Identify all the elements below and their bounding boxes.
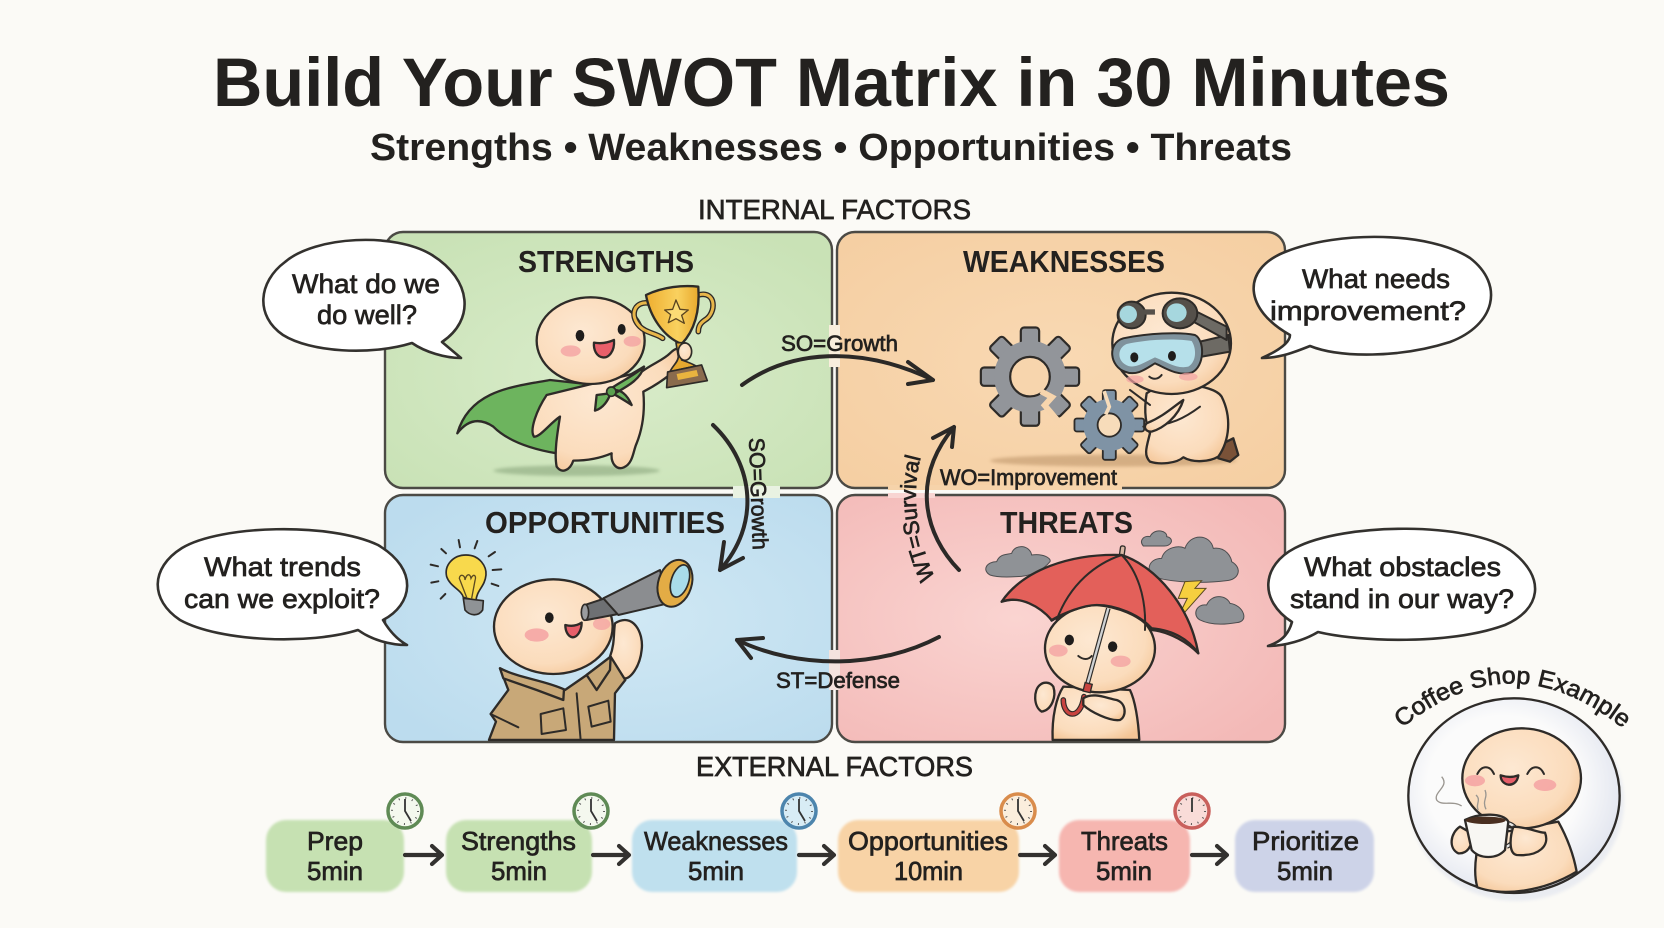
step: prep: Prep (307, 826, 363, 856)
speech bubble: what obstacles stand in our way: stand in our way? (1290, 584, 1514, 614)
arrow: SO growth horizontal: SO=Growth (781, 331, 898, 356)
speech bubble: what do we do well: do well? (317, 300, 417, 330)
step: strengths: Strengths (461, 826, 576, 856)
panel: opportunities (385, 495, 832, 742)
speech bubble: what needs improvement (1254, 237, 1491, 358)
icon: safety goggles (1112, 333, 1202, 374)
speech bubble: what do we do well (263, 240, 465, 358)
step: threats: 5min (1096, 856, 1152, 886)
arrow: WT survival: WT=Survival (900, 454, 934, 584)
icon: coffee cup (1465, 815, 1508, 857)
heading: threats: THREATS (1000, 505, 1133, 540)
icon: clock green (574, 794, 608, 828)
label: WO improvement: WO=Improvement (940, 465, 1117, 490)
character: coffee drinker (1436, 728, 1581, 892)
step: weaknesses: Weaknesses (644, 826, 788, 856)
icon: clock green (388, 794, 422, 828)
speech bubble: what obstacles stand in our way (1268, 529, 1535, 646)
arrow: ST defense: ST=Defense (776, 668, 900, 693)
icon: broken gear large (981, 328, 1079, 426)
speech bubble: what trends can we exploit: What trends (204, 552, 361, 582)
speech bubble: what trends can we exploit: can we exploit? (184, 584, 380, 614)
timeline: 30-minute process (266, 794, 1374, 892)
heading: opportunities: OPPORTUNITIES (485, 505, 725, 540)
arrow: WT survival (900, 424, 962, 584)
arrows between steps (405, 846, 1227, 864)
panel: strengths (385, 232, 832, 488)
icon: light bulb (431, 540, 501, 615)
icon: storm clouds (986, 531, 1244, 624)
speech bubble: what needs improvement: What needs (1302, 264, 1450, 294)
icon: clock red (1175, 794, 1209, 828)
step: prep: 5min (307, 856, 363, 886)
speech bubble: what obstacles stand in our way: What obstacles (1304, 552, 1501, 582)
step: weaknesses: 5min (688, 856, 744, 886)
icon: clock blue (782, 794, 816, 828)
step: prioritize: 5min (1277, 856, 1333, 886)
character: umbrella in the storm (986, 531, 1244, 740)
coffee shop example badge (1396, 667, 1628, 901)
heading: strengths: STRENGTHS (518, 244, 694, 279)
icon: telescope (581, 555, 698, 620)
step: prioritize (1235, 820, 1374, 892)
subtitle: Strengths • Weaknesses • Opportunities • Threats (370, 127, 1292, 169)
axis label: external factors: EXTERNAL FACTORS (696, 751, 973, 782)
step: opportunities (838, 820, 1019, 892)
arrow: SO growth vertical (713, 425, 773, 570)
coffee shop example badge: Coffee Shop Example (1396, 667, 1628, 726)
label: coffee shop example (1396, 683, 1628, 733)
speech bubble: what trends can we exploit (158, 529, 407, 645)
step: strengths: 5min (491, 856, 547, 886)
arrow: SO growth vertical: SO=Growth (744, 437, 773, 550)
step: threats: Threats (1081, 826, 1168, 856)
arrow: ST defense (737, 637, 939, 693)
axis label: internal factors: INTERNAL FACTORS (698, 194, 971, 225)
panel: weaknesses (837, 232, 1285, 488)
icon: broken gear small (1074, 390, 1144, 460)
step: threats (1059, 820, 1190, 892)
character: mechanic with broken gears (981, 293, 1238, 467)
character: explorer with telescope (431, 540, 698, 740)
speech bubble: what needs improvement: improvement? (1270, 296, 1466, 326)
step: prep (266, 820, 404, 892)
step: opportunities: Opportunities (848, 826, 1008, 856)
step: strengths (446, 820, 592, 892)
step: weaknesses (632, 820, 797, 892)
heading: weaknesses: WEAKNESSES (963, 244, 1165, 279)
icon: red umbrella (1002, 546, 1198, 687)
icon: goggles on forehead (1118, 298, 1197, 328)
character: hero with trophy (457, 286, 713, 476)
icon: clock orange (1001, 794, 1035, 828)
speech bubble: what do we do well: What do we (292, 269, 440, 299)
step: opportunities: 10min (894, 856, 963, 886)
step: prioritize: Prioritize (1252, 826, 1359, 856)
panel: threats (837, 495, 1285, 742)
arrow: SO growth horizontal (742, 331, 933, 385)
title: Build Your SWOT Matrix in 30 Minutes (213, 44, 1450, 121)
